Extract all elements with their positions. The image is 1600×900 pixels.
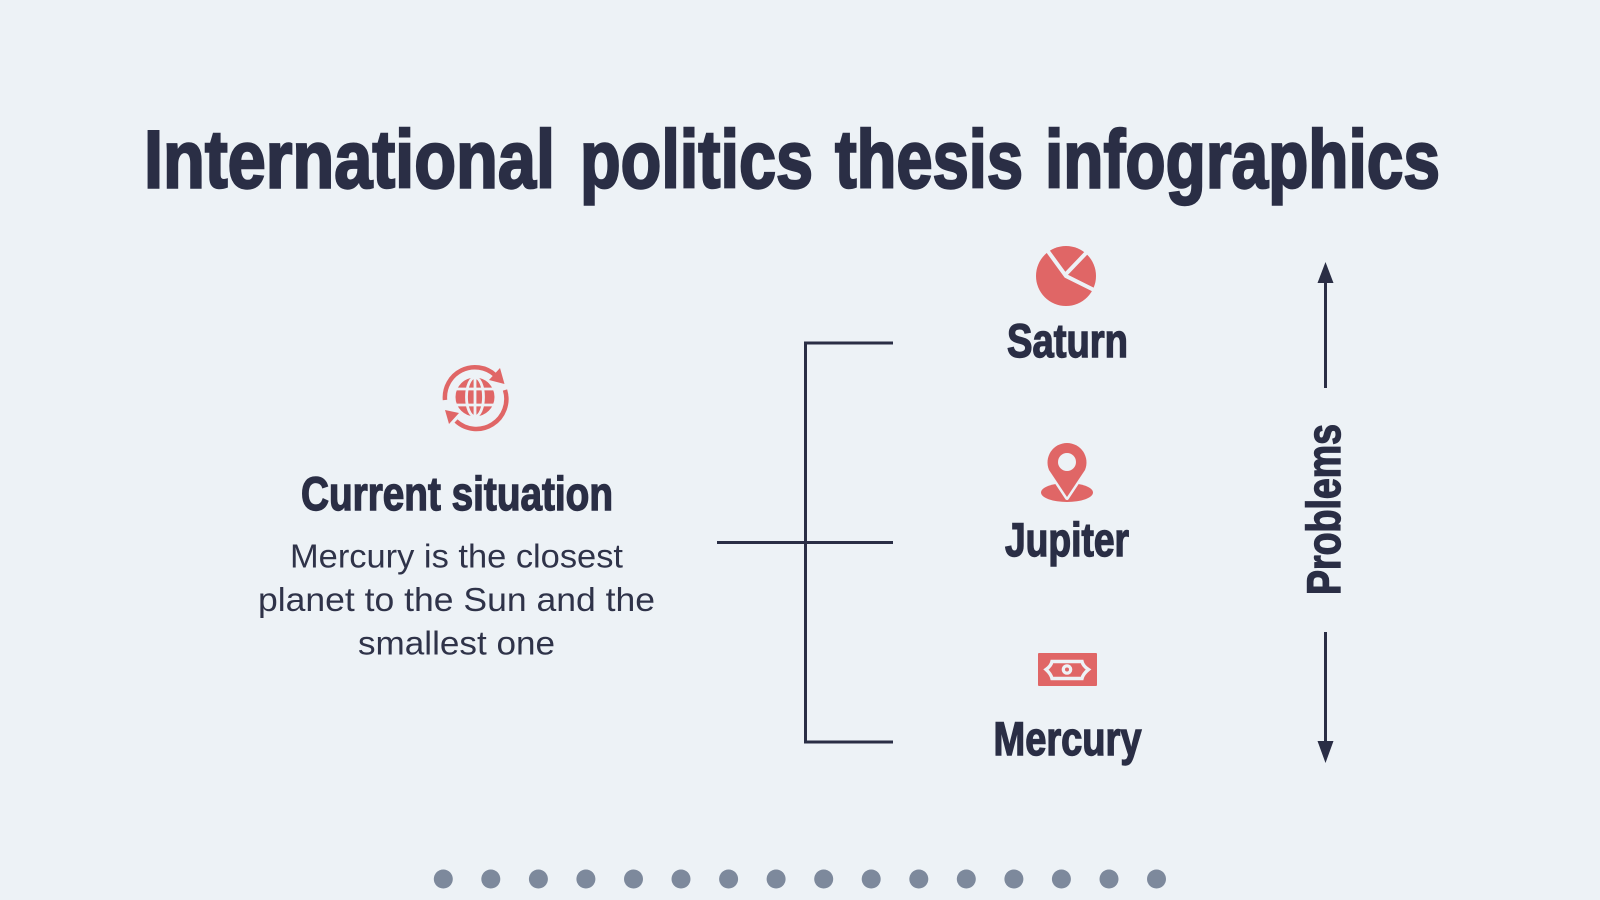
- icon: rotating globe: [445, 367, 506, 429]
- label: Saturn: Saturn: [1007, 314, 1128, 367]
- icon: map pin: [1041, 442, 1093, 502]
- arrow: up: [1318, 262, 1334, 388]
- arrow: down: [1318, 632, 1334, 763]
- item: Mercury: [994, 653, 1142, 765]
- heading: current situation: Current situation: [301, 467, 613, 520]
- title: International: [144, 114, 555, 206]
- title: infographics: [1045, 114, 1440, 206]
- title: [144, 114, 1440, 206]
- text block: description: [258, 538, 655, 662]
- text block: description: smallest one: [358, 625, 555, 662]
- label: Problems: Problems: [1297, 424, 1350, 595]
- title: thesis: [835, 114, 1023, 206]
- label: Mercury: Mercury: [994, 712, 1142, 765]
- icon: banknote: [1038, 653, 1097, 686]
- icon: pie chart: [1036, 246, 1096, 306]
- item: Jupiter: [1005, 442, 1129, 566]
- panel: current situation: [258, 367, 655, 662]
- bracket connector: [717, 343, 893, 742]
- title: politics: [580, 114, 813, 206]
- text block: description: planet to the Sun and the: [258, 581, 655, 618]
- text block: description: Mercury is the closest: [290, 538, 623, 575]
- pagination dots: [434, 870, 1166, 888]
- label: Jupiter: Jupiter: [1005, 513, 1129, 566]
- item: Saturn: [1007, 246, 1128, 367]
